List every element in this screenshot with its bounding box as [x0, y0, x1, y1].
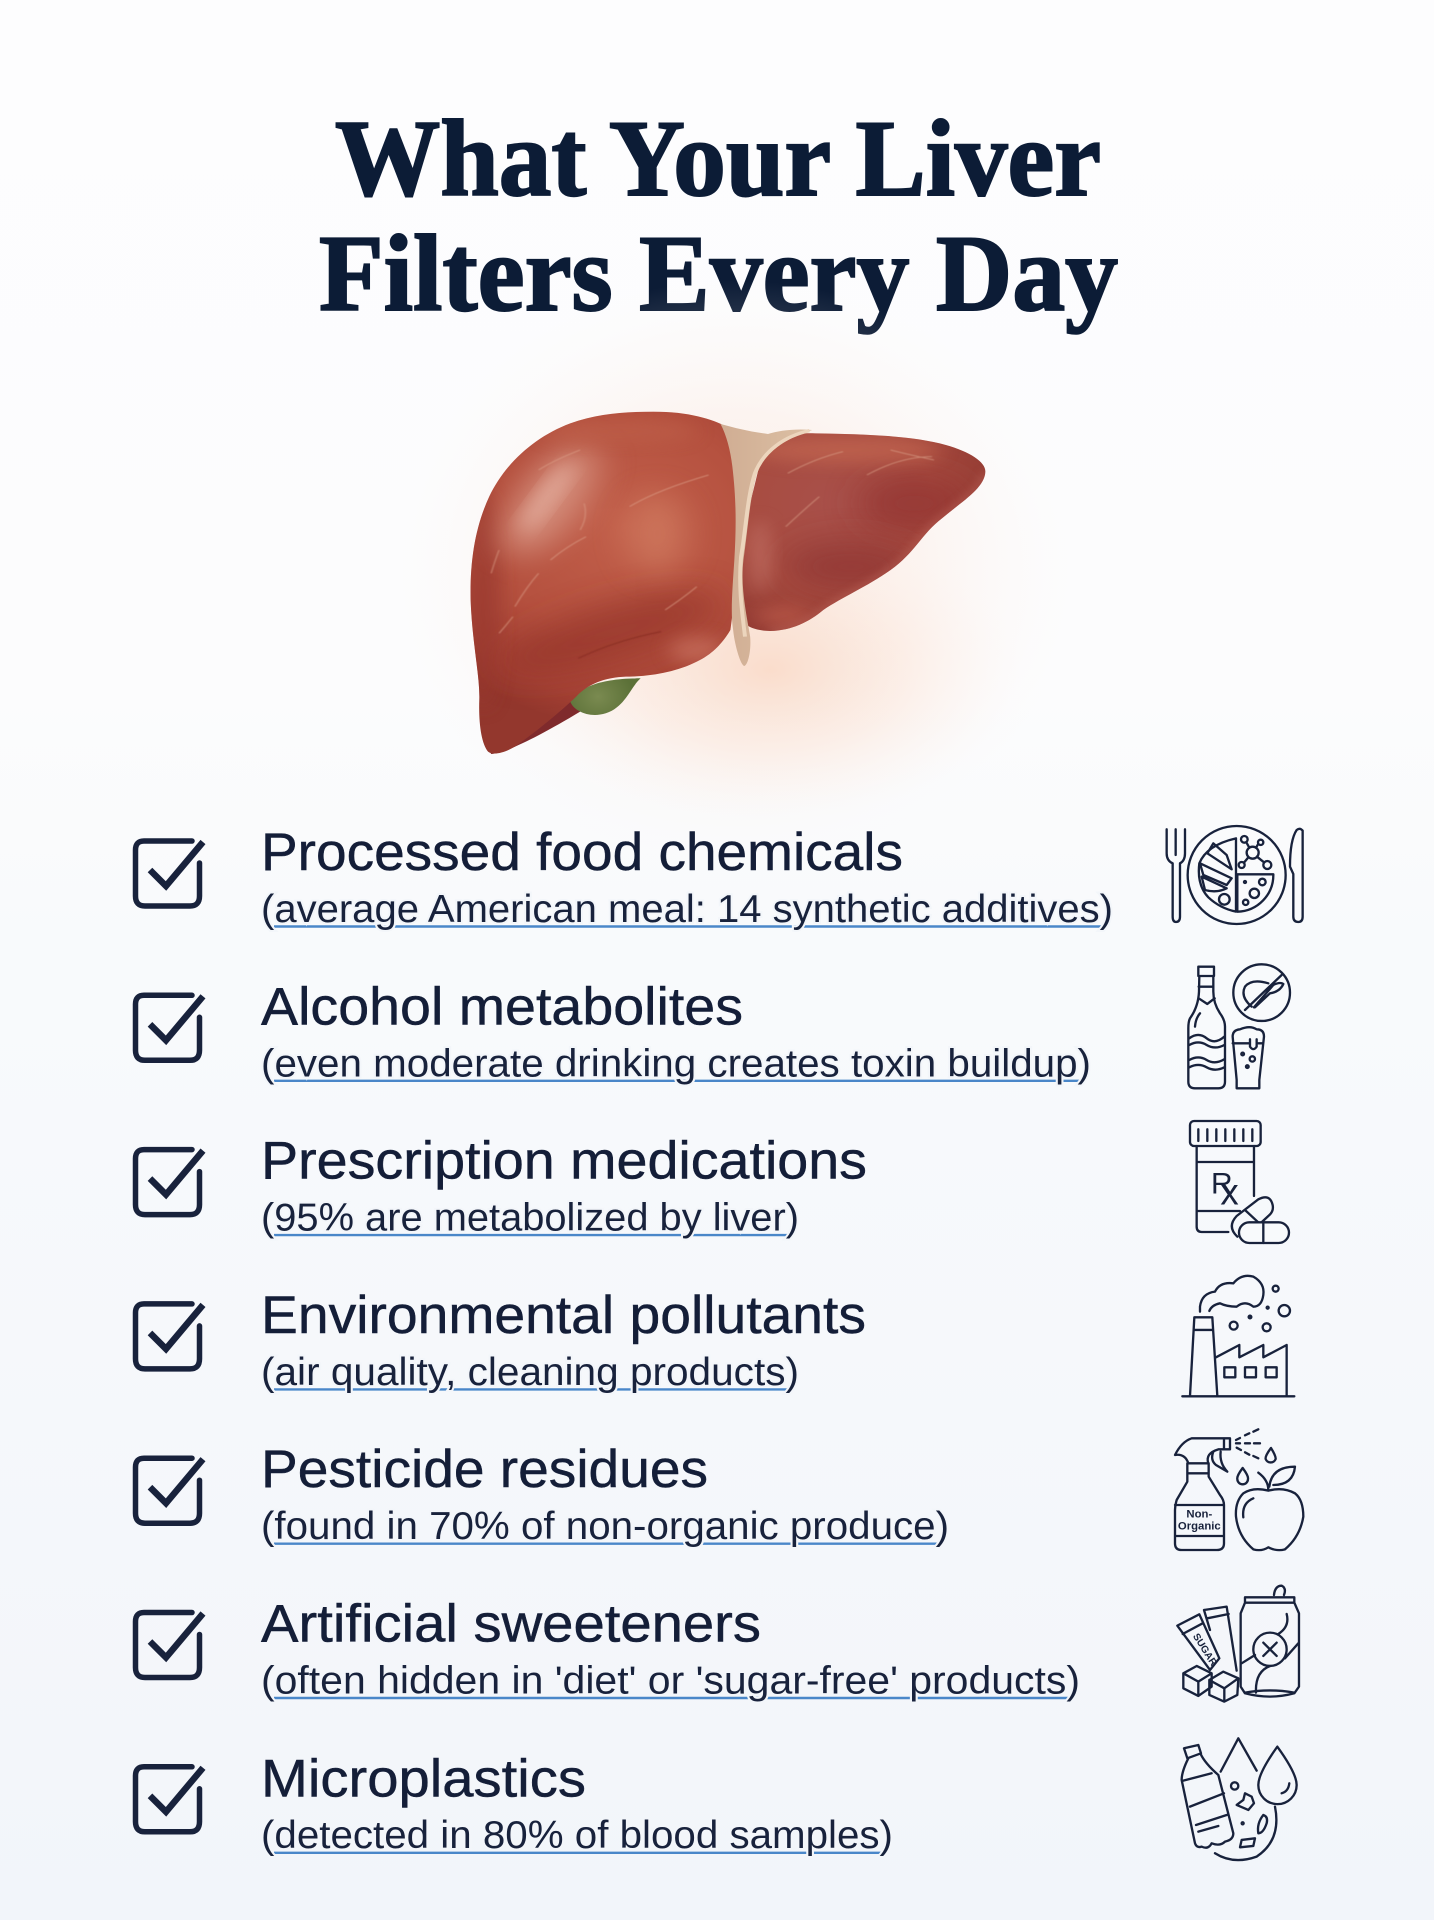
liver illustration [470, 292, 986, 792]
right lobe [742, 433, 986, 631]
falciform ligament [721, 424, 812, 666]
checkbox [136, 1767, 203, 1832]
checkbox [136, 1150, 203, 1215]
heading text: Microplastics [261, 1750, 586, 1808]
detail text with underline: (95% are metabolized by liver) [261, 1197, 799, 1240]
icon: spray bottle and apple: Non- [1186, 1509, 1212, 1521]
soft glow behind liver [395, 280, 1075, 860]
checkbox [136, 995, 203, 1060]
detail text with underline: (air quality, cleaning products) [261, 1351, 799, 1394]
icon: sugar and soda can [1177, 1586, 1299, 1702]
icon: sugar and soda can: SUGAR [1190, 1632, 1219, 1668]
row 2: alcohol [136, 964, 1290, 1088]
liver underside [487, 690, 586, 754]
heading text: Prescription medications [261, 1132, 867, 1191]
heading text: Processed food chemicals [261, 823, 903, 882]
gallbladder [570, 678, 641, 715]
icon: pill bottle: R [1211, 1167, 1233, 1200]
left lobe [470, 412, 736, 754]
checkbox [136, 1458, 203, 1523]
checklist [136, 823, 1303, 1860]
icon: plate with fork and knife [1167, 826, 1303, 924]
heading text: Artificial sweeteners [261, 1594, 761, 1654]
checkbox [136, 841, 203, 906]
detail text with underline: (found in 70% of non-organic produce) [261, 1505, 949, 1548]
heading text: Alcohol metabolites [261, 977, 743, 1036]
icon: plastic bottle and drops [1182, 1738, 1297, 1860]
checkbox [136, 1304, 203, 1369]
icon: bottle and beer [1188, 964, 1290, 1088]
detail text with underline: (even moderate drinking creates toxin buildup) [261, 1042, 1091, 1085]
title: What Your Liver [335, 98, 1101, 219]
liver organ [460, 403, 997, 763]
icon: spray bottle and apple [1175, 1429, 1303, 1550]
icon: pill bottle [1190, 1121, 1289, 1243]
title [319, 98, 1118, 334]
row 3: medications [136, 1121, 1289, 1243]
heading text: Pesticide residues [261, 1440, 708, 1499]
icon: factory [1182, 1276, 1294, 1396]
title: Filters Every Day [319, 213, 1118, 334]
row 6: sweeteners [136, 1586, 1299, 1702]
icon: pill bottle: x [1220, 1171, 1239, 1212]
detail text with underline: (detected in 80% of blood samples) [261, 1814, 893, 1857]
heading text: Environmental pollutants [261, 1286, 866, 1345]
row 5: pesticides [136, 1429, 1303, 1550]
icon: spray bottle and apple: Organic [1178, 1520, 1221, 1532]
detail text with underline: (average American meal: 14 synthetic additives) [261, 888, 1113, 931]
checkbox [136, 1612, 203, 1678]
row 7: microplastics [136, 1738, 1297, 1860]
row 4: pollutants [136, 1276, 1294, 1396]
row 1: processed food [136, 823, 1303, 931]
detail text with underline: (often hidden in 'diet' or 'sugar-free' products) [261, 1660, 1080, 1702]
